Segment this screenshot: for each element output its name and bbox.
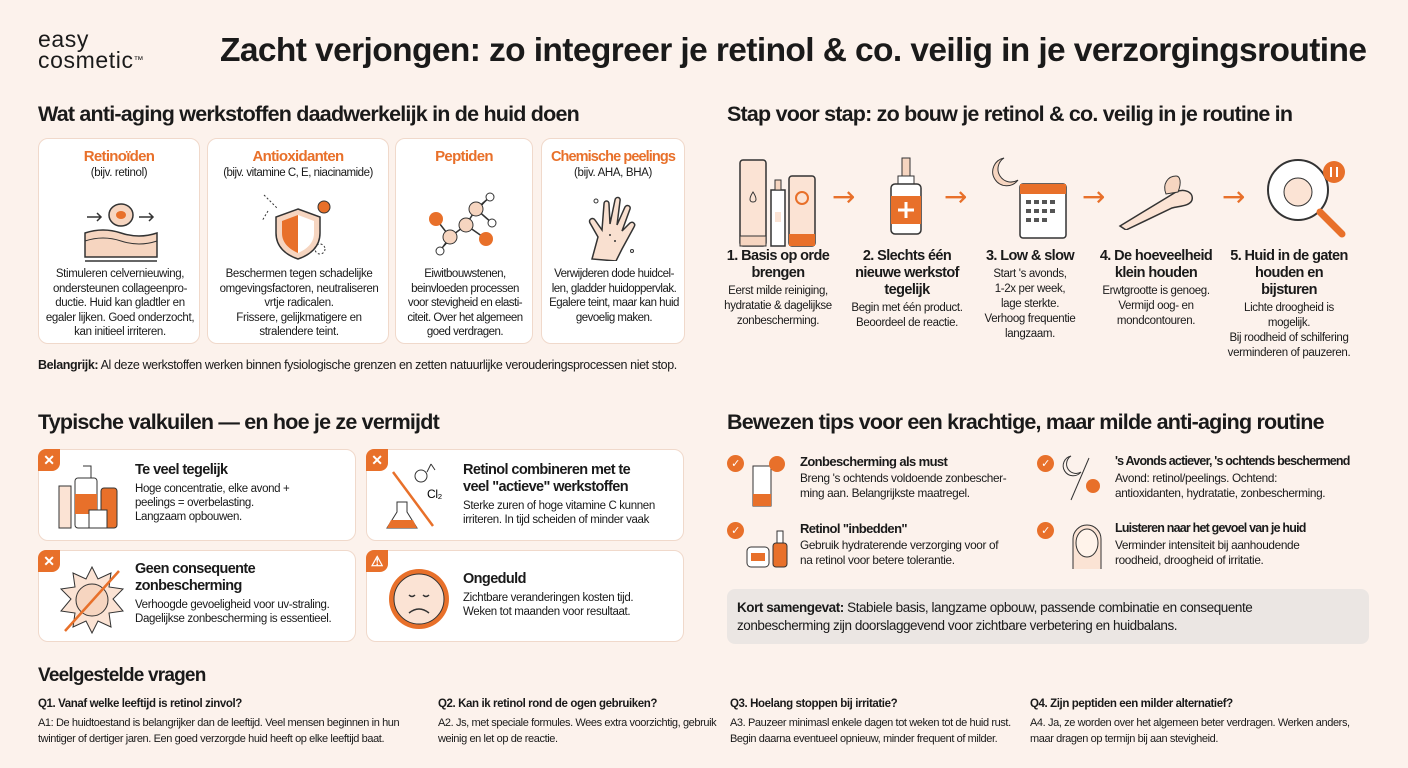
icon: flask: Cl₂ (427, 487, 443, 501)
card: retinoiden: (bijv. retinol) (91, 166, 147, 178)
card: peelings (541, 138, 685, 344)
tip 4: ✓ (1041, 524, 1050, 537)
tip 1: ✓ (731, 457, 740, 470)
tip 4: Verminder intensiteit bij aanhoudende (1115, 538, 1299, 552)
panel: pitfall 1: Hoge concentratie, elke avond + (135, 483, 289, 495)
step 5: 5. Huid in de gaten houden en bijsturen (1230, 248, 1348, 298)
logo: easy (38, 26, 89, 52)
step 5: Bij roodheid of schilfering verminderen of pauzeren. (1228, 332, 1350, 359)
panel: pitfall 4: Weken tot maanden voor resultaat. (463, 606, 630, 618)
icon: sunscreen (752, 456, 785, 506)
card: peptiden (395, 138, 533, 344)
icon: serum bottle (890, 158, 922, 235)
panel: pitfall 3: Geen consequente (135, 561, 255, 577)
arrow: → (832, 180, 855, 213)
faq 2: Q2. Kan ik retinol rond de ogen gebruiken? (438, 698, 657, 710)
step 3: lage sterkte. (1001, 298, 1059, 310)
arrow: → (944, 180, 967, 213)
tip 2: Avond: retinol/peelings. Ochtend: (1115, 471, 1277, 485)
logo (38, 26, 144, 73)
panel: pitfall 1: Langzaam opbouwen. (135, 511, 242, 523)
faq 3 (730, 698, 1011, 745)
card: peelings: Verwijderen dode huidcel-len, gladder huidoppervlak. Egalere teint, maar kan huid gevoelig maken. (549, 268, 679, 324)
card: peptiden: Eiwitbouwstenen, beinvloeden processen voor stevigheid en elasti-citeit. Over het algemeen goed verdragen. (407, 268, 523, 338)
step 3 (984, 248, 1076, 340)
step 2 (851, 248, 963, 329)
panel: pitfall 3: Dagelijkse zonbescherming is essentieel. (135, 613, 331, 625)
panel: steps (724, 158, 1350, 359)
step 1: 1. Basis op orde brengen (727, 248, 829, 281)
faq 4: Q4. Zijn peptiden een milder alternatief? (1030, 698, 1233, 710)
card: antioxidanten: (bijv. vitamine C, E, niacinamide) (223, 166, 373, 178)
step 2: Begin met één product. Beoordeel de reactie. (851, 302, 963, 329)
heading: valkuilen: Typische valkuilen — en hoe je ze vermijdt (38, 410, 439, 434)
panel: pitfall 3: Verhoogde gevoeligheid voor uv-straling. (135, 599, 329, 611)
panel: pitfall 2: Retinol combineren met te (463, 462, 630, 478)
panel: pitfall 1: ✕ (43, 452, 55, 468)
heading: werkstoffen: Wat anti-aging werkstoffen daadwerkelijk in de huid doen (38, 102, 579, 126)
faq 3: Q3. Hoelang stoppen bij irritatie? (730, 698, 897, 710)
icon: moon sun (1062, 456, 1100, 500)
tip 2: antioxidanten, hydratatie, zonbescherming. (1115, 486, 1325, 500)
panel: pitfall 3: zonbescherming (135, 578, 242, 594)
panel: pitfall 3 (38, 550, 356, 642)
card: peelings: Chemische peelings (551, 149, 675, 165)
faq 4 (1030, 698, 1350, 745)
summary box: zonbescherming zijn doorslaggevend voor zichtbare verbetering en huidbalans. (737, 618, 1177, 633)
panel: pitfall 4: ⚠ (371, 553, 383, 569)
faq 2: A2. Js, met speciale formules. Wees extra voorzichtig, gebruik weinig en let op de reactie. (438, 717, 716, 745)
faq 1: Q1. Vanaf welke leeftijd is retinol zinvol? (38, 698, 242, 710)
tip 3: ✓ (731, 524, 740, 537)
step 3: Start 's avonds, (993, 268, 1067, 280)
panel: pitfall 4: Zichtbare veranderingen kosten tijd. (463, 592, 633, 604)
icon: skin cell (84, 203, 158, 262)
faq 4: A4. Ja, ze worden over het algemeen beter verdragen. Werken anders, maar dragen op termijn bij aan stevigheid. (1030, 717, 1350, 745)
tip 1 (727, 454, 1006, 506)
tip 3: na retinol voor betere tolerantie. (800, 553, 955, 567)
icon: sad clock (389, 569, 449, 629)
tip 4 (1037, 521, 1306, 569)
heading: stap voor stap: Stap voor stap: zo bouw je retinol & co. veilig in je routine in (727, 102, 1292, 126)
tip 1: ming aan. Belangrijkste maatregel. (800, 486, 970, 500)
panel: pitfall 2: Sterke zuren of hoge vitamine C kunnen (463, 500, 655, 512)
panel: pitfall 3: ✕ (43, 553, 55, 569)
card: antioxidanten: Beschermen tegen schadelijke omgevingsfactoren, neutraliseren vrtje radicalen. (220, 268, 378, 309)
icon: molecule (429, 192, 496, 256)
icon: tubes (739, 159, 816, 247)
card: antioxidanten: Antioxidanten (253, 148, 343, 165)
icon: crossed sun (60, 566, 124, 634)
tip 1: Breng 's ochtends voldoende zonbescher- (800, 471, 1006, 485)
logo: cosmetic™ (38, 47, 144, 73)
tip 2 (1037, 454, 1350, 500)
step 5 (1228, 248, 1350, 359)
icon: face (1072, 524, 1102, 569)
tip 3 (727, 521, 999, 568)
panel: pitfall 2: ✕ (371, 452, 383, 468)
card: peelings: (bijv. AHA, BHA) (574, 166, 652, 178)
card: retinoiden: Retinoïden (84, 148, 154, 165)
tip 3: Gebruik hydraterende verzorging voor of (800, 538, 998, 552)
step 4: 4. De hoeveelheid klein houden (1100, 248, 1212, 281)
panel: pitfall 1: Te veel tegelijk (135, 462, 228, 478)
tip 1: Zonbescherming als must (800, 454, 947, 469)
step 4: Erwtgrootte is genoeg. Vermijd oog- en mondcontouren. (1102, 285, 1210, 327)
heading: tips: Bewezen tips voor een krachtige, maar milde anti-aging routine (727, 410, 1324, 434)
card: antioxidanten: Frissere, gelijkmatigere en stralendere teint. (236, 312, 362, 338)
panel: pitfall 2: irriteren. In tijd scheiden of minder vaak (463, 514, 649, 526)
icon: products (58, 466, 118, 528)
card: peptiden: Peptiden (435, 148, 493, 165)
tip 3: Retinol "inbedden" (800, 521, 907, 536)
panel: pitfall 4 (366, 550, 684, 642)
arrow: → (1082, 180, 1105, 213)
tip 4: Luisteren naar het gevoel van je huid (1115, 521, 1306, 535)
step 3: 1-2x per week, (995, 283, 1065, 295)
note: belangrijk: Belangrijk: Al deze werkstoffen werken binnen fysiologische grenzen en zetten natuurlijke verouderingsprocessen niet stop. (38, 358, 677, 372)
step 3: 3. Low & slow (986, 248, 1074, 264)
icon: moon calendar (992, 158, 1067, 239)
step 2: 2. Slechts één nieuwe werkstof tegelijk (855, 248, 959, 298)
icon: flask (386, 464, 443, 528)
icon: cream and serum (746, 530, 788, 568)
panel: pitfall 2: veel "actieve" werkstoffen (463, 479, 628, 495)
panel: pitfall 1 (38, 449, 356, 541)
step 1: Eerst milde reiniging, hydratatie & dagelijkse zonbescherming. (724, 285, 832, 327)
card: retinoiden: Stimuleren celvernieuwing, ondersteunen collageenpro-ductie. Huid kan gladtler en egaler lijken. Goed onderzocht, kan initieel irriteren. (46, 268, 194, 338)
step 5: Lichte droogheid is mogelijk. (1244, 302, 1334, 329)
tip 4: roodheid, droogheid of irritatie. (1115, 553, 1263, 567)
title: Zacht verjongen: zo integreer je retinol & co. veilig in je verzorgingsroutine (220, 32, 1366, 69)
summary box: Kort samengevat: Stabiele basis, langzame opbouw, passende combinatie en consequente (737, 600, 1252, 615)
tip 2: ✓ (1041, 457, 1050, 470)
summary box (727, 589, 1369, 644)
faq 1: A1: De huidtoestand is belangrijker dan de leeftijd. Veel mensen beginnen in hun twintiger of dertiger jaren. Een goed verzorgde huid heeft op elke leeftijd baat. (38, 717, 399, 745)
faq 1 (38, 698, 399, 745)
icon: shield (262, 194, 330, 260)
card: antioxidanten (207, 138, 389, 344)
icon: hand (588, 196, 636, 261)
heading: FAQ: Veelgestelde vragen (38, 665, 206, 686)
panel: werkstoffen cards (38, 138, 685, 344)
panel: pitfall 1: peelings = overbelasting. (135, 497, 254, 509)
tip 2: 's Avonds actiever, 's ochtends beschermend (1115, 454, 1350, 468)
faq 3: A3. Pauzeer minimasl enkele dagen tot weken tot de huid rust. Begin daarna eventueel opnieuw, minder frequent of milder. (730, 717, 1011, 745)
step 1 (724, 248, 832, 327)
panel: pitfall 4: Ongeduld (463, 571, 526, 587)
card: retinoiden (38, 138, 200, 344)
panel: pitfall 2 (366, 449, 684, 541)
icon: magnifier face (1267, 159, 1346, 238)
arrow: → (1222, 180, 1245, 213)
step 4 (1100, 248, 1212, 327)
icon: fingertip (1118, 176, 1193, 230)
step 3: Verhoog frequentie langzaam. (985, 313, 1075, 340)
faq 2 (438, 698, 717, 745)
